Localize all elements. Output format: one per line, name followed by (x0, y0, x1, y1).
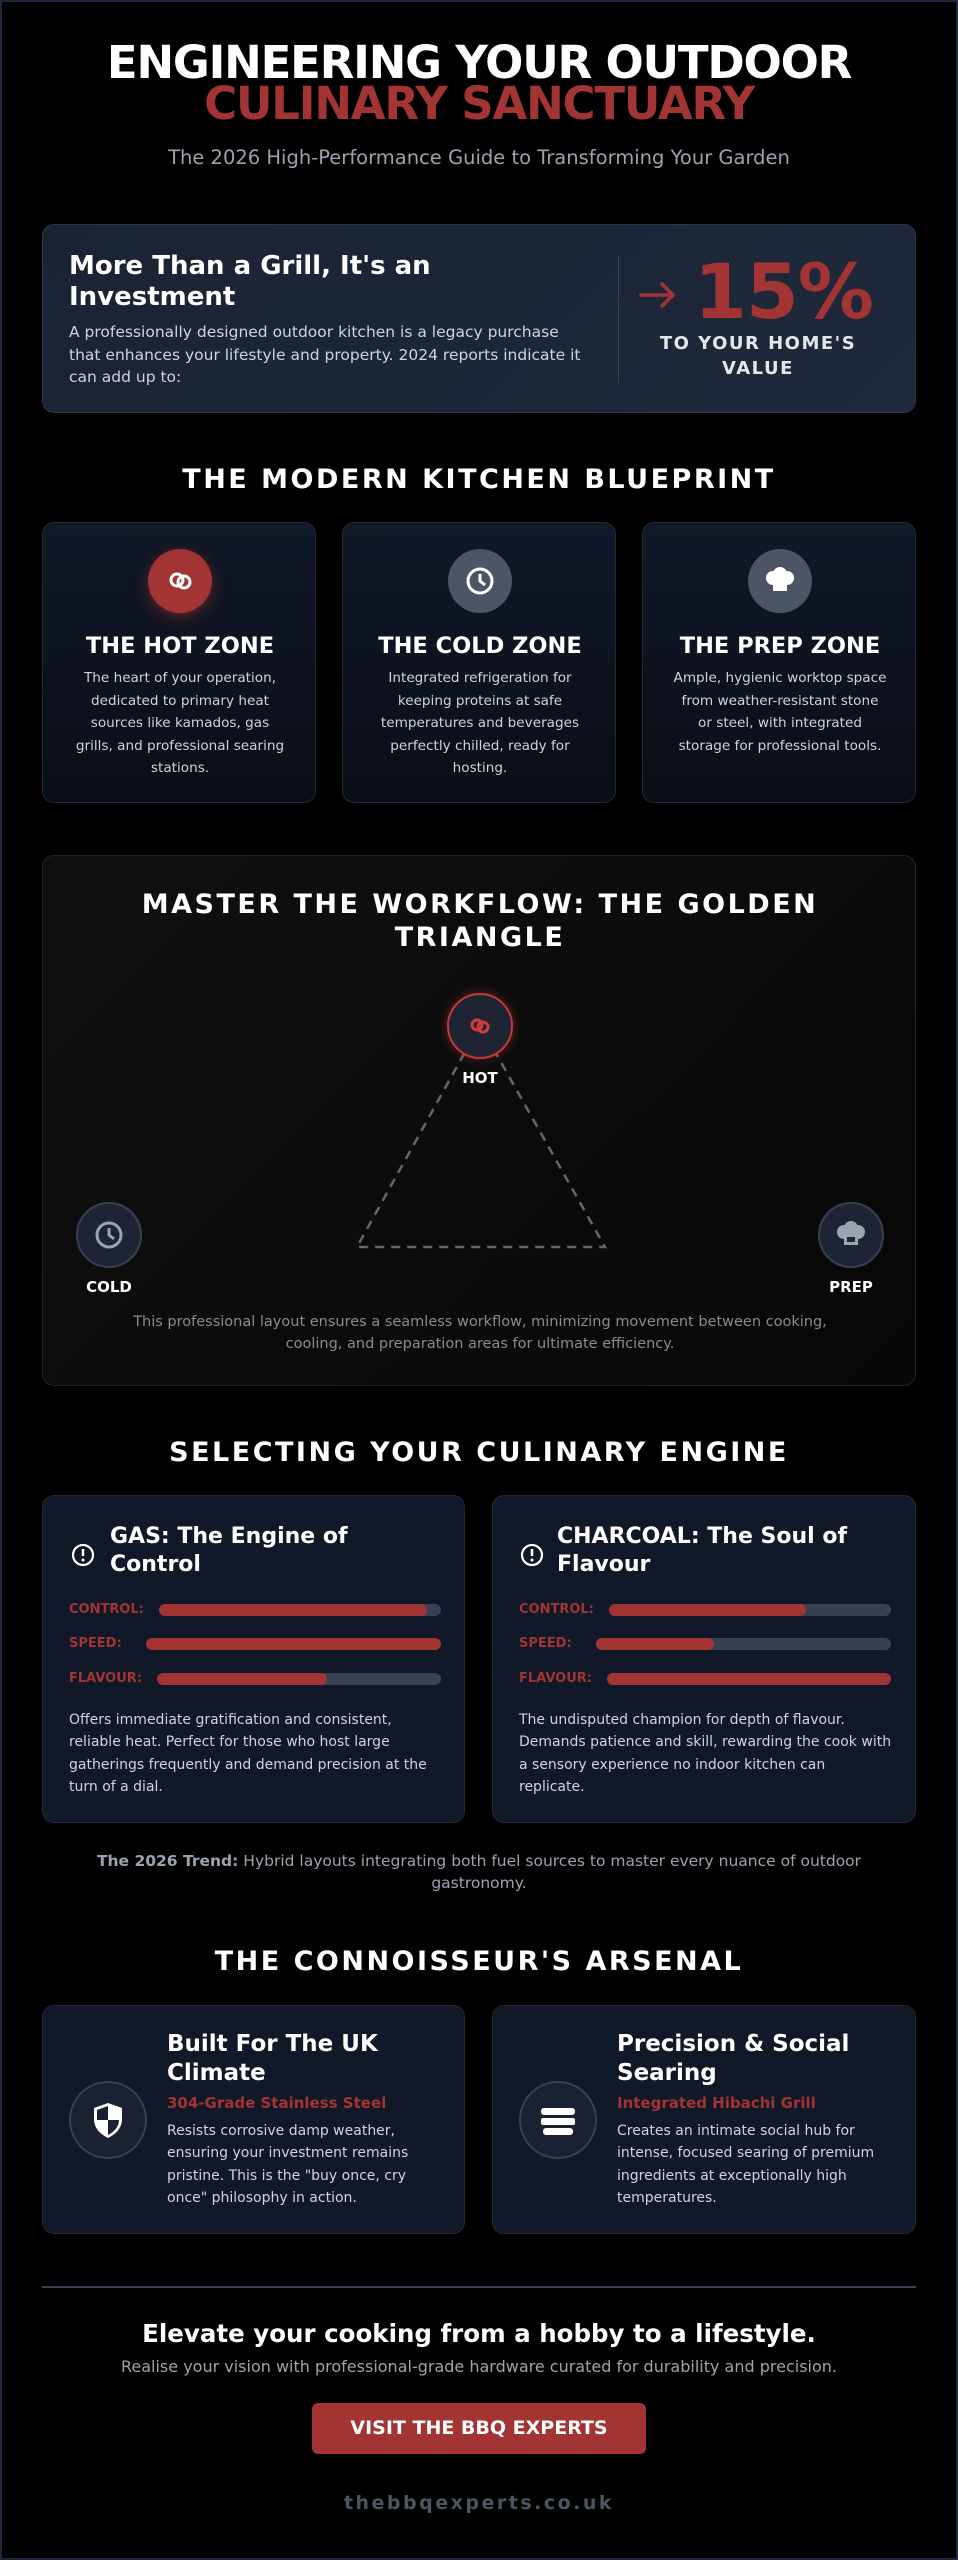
text: cold zone: Integrated refrigeration for keeping proteins at safe temperatures and beverages perfectly chilled, ready for hosting. (381, 670, 579, 776)
icon: shield (69, 2081, 147, 2159)
subtitle: The 2026 High-Performance Guide to Transforming Your Garden (168, 146, 790, 169)
icon: grill (519, 2081, 597, 2159)
investment text: A professionally designed outdoor kitchen is a legacy purchase that enhances your lifestyle and property. 2024 reports indicate it can add up to: (69, 323, 580, 386)
text: UK climate: Resists corrosive damp weather, ensuring your investment remains pristine. This is the "buy once, cry once" philosophy in action. (167, 2123, 408, 2206)
stat: 15% (639, 247, 873, 379)
panel: gas (42, 1495, 465, 1823)
heading: engine: SELECTING YOUR CULINARY ENGINE (169, 1437, 789, 1468)
icon: charcoal alert (520, 1544, 544, 1566)
text: prep zone: Ample, hygienic worktop space from weather-resistant stone or steel, with integrated storage for professional tools. (674, 670, 886, 754)
text: charcoal: The undisputed champion for depth of flavour. Demands patience and skill, rewarding the cook with a sensory experience no indoor kitchen can replicate. (519, 1712, 891, 1795)
triangle diagram (358, 1054, 607, 1248)
bar chart: charcoal: FLAVOUR: (519, 1671, 592, 1686)
button: VISIT THE BBQ EXPERTS (350, 2417, 608, 2439)
CTA heading: Elevate your cooking from a hobby to a lifestyle. (142, 2319, 816, 2348)
title: UK climate: Built For The UK Climate (167, 2031, 378, 2086)
node: cold: COLD (86, 1278, 132, 1296)
node: prep: PREP (829, 1278, 873, 1296)
title: ENGINEERING YOUR OUTDOOR (107, 36, 851, 89)
node: hot (441, 987, 519, 1087)
subtitle: hibachi: Integrated Hibachi Grill (617, 2094, 816, 2112)
title: charcoal: CHARCOAL: The Soul of Flavour (557, 1524, 847, 1577)
bar chart: charcoal: SPEED: (519, 1636, 572, 1651)
text: hibachi: Creates an intimate social hub for intense, focused searing of premium ingredients at exceptionally high temperatures. (617, 2123, 874, 2206)
heading: workflow: MASTER THE WORKFLOW: THE GOLDEN TRIANGLE (142, 889, 818, 953)
text: hot zone: The heart of your operation, dedicated to primary heat sources like kamados, gas grills, and professional searing stations. (76, 670, 284, 776)
bar chart: gas (69, 1602, 441, 1686)
panel: investment (42, 224, 916, 413)
title: gas: GAS: The Engine of Control (110, 1524, 348, 1577)
bar chart: gas: SPEED: (69, 1636, 122, 1651)
stat: 15%: TO YOUR HOME'S VALUE (660, 333, 856, 379)
stat: 15%: 15% (694, 247, 873, 336)
node: cold (76, 1202, 142, 1296)
icon: arrow (639, 282, 675, 308)
button (312, 2403, 646, 2454)
icon: chef hat (748, 549, 812, 613)
title (107, 36, 852, 130)
title: prep zone: THE PREP ZONE (680, 633, 880, 659)
bar chart: gas: FLAVOUR: (69, 1671, 142, 1686)
panel: UK climate (42, 2005, 465, 2234)
node: prep (818, 1202, 884, 1296)
panel: charcoal (492, 1495, 916, 1823)
bar chart: charcoal: CONTROL: (519, 1602, 594, 1617)
heading: arsenal: THE CONNOISSEUR'S ARSENAL (215, 1946, 743, 1977)
title: hibachi: Precision & Social Searing (617, 2031, 849, 2086)
panel: golden triangle (42, 855, 916, 1386)
CTA subtext: Realise your vision with professional-grade hardware curated for durability and precision. (121, 2357, 837, 2376)
panel: cold zone (342, 522, 616, 803)
panel: prep zone (642, 522, 916, 803)
subtitle: steel: 304-Grade Stainless Steel (167, 2094, 386, 2112)
title: hot zone: THE HOT ZONE (86, 633, 274, 659)
trend note: The 2026 Trend: Hybrid layouts integrating both fuel sources to master every nuance of outdoor gastronomy. (97, 1852, 861, 1892)
footer url: thebbqexperts.co.uk (344, 2492, 614, 2514)
bar chart: gas: CONTROL: (69, 1602, 144, 1617)
heading: blueprint: THE MODERN KITCHEN BLUEPRINT (182, 464, 776, 495)
title: cold zone: THE COLD ZONE (378, 633, 582, 659)
icon: gas alert (72, 1544, 94, 1566)
panel: hibachi (492, 2005, 916, 2234)
icon: clock (448, 549, 512, 613)
icon: hot (148, 549, 212, 613)
bar chart: charcoal (519, 1602, 891, 1686)
panel: hot zone (42, 522, 316, 803)
caption: workflow: This professional layout ensures a seamless workflow, minimizing movement between cooking, cooling, and preparation areas for ultimate efficiency. (133, 1314, 827, 1352)
panel: golden triangle: HOT (462, 1069, 498, 1087)
title: CULINARY SANCTUARY (204, 77, 754, 130)
investment heading: More Than a Grill, It's an Investment (69, 251, 431, 312)
text: gas: Offers immediate gratification and consistent, reliable heat. Perfect for those who host large gatherings frequently and demand precision at the turn of a dial. (69, 1712, 427, 1795)
